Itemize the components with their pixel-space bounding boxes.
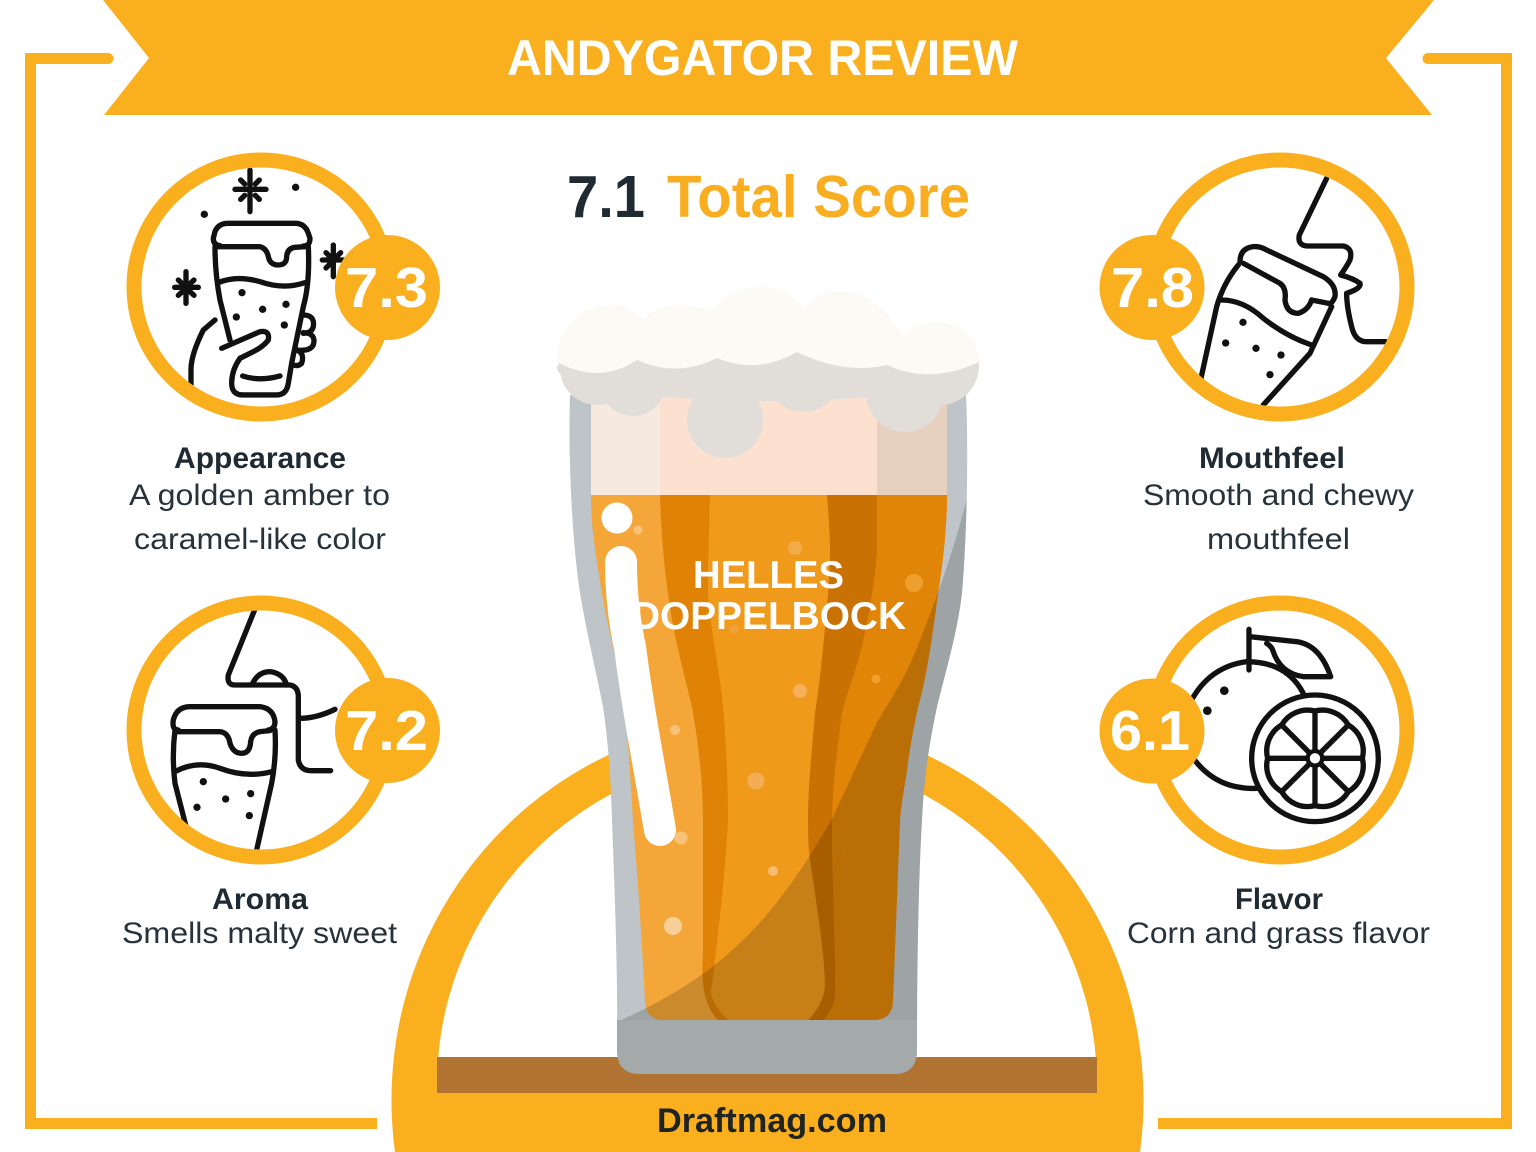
score badge: 7.2 — [345, 699, 428, 763]
aroma text: Smells malty sweet — [122, 917, 398, 950]
aroma text: Aroma — [212, 883, 308, 916]
icon: orange and slice — [1192, 629, 1378, 822]
glass shadow — [617, 499, 967, 1055]
score badge — [335, 678, 440, 783]
total score heading: Total Score — [667, 164, 970, 230]
flavor text: Corn and grass flavor — [1127, 917, 1430, 950]
source credit: Draftmag.com — [657, 1102, 887, 1140]
score badge: 6.1 — [1110, 699, 1190, 763]
score badge: 7.3 — [345, 256, 428, 320]
score badge — [1100, 678, 1204, 784]
appearance text: A golden amber to — [129, 479, 390, 512]
glass label: HELLES — [693, 554, 844, 597]
score badge — [335, 235, 440, 340]
title: ANDYGATOR REVIEW — [507, 30, 1019, 86]
beer — [580, 495, 960, 1025]
foam — [557, 287, 979, 458]
glass highlight — [602, 502, 660, 830]
score badge: 7.8 — [1111, 256, 1194, 320]
flavor text: Flavor — [1235, 883, 1323, 916]
aroma text — [122, 883, 398, 950]
glass base — [617, 1020, 917, 1074]
panel: appearance — [129, 160, 440, 556]
panel: flavor — [1100, 603, 1430, 950]
mouthfeel text: Mouthfeel — [1199, 442, 1345, 475]
panel: aroma — [122, 603, 440, 950]
mouthfeel text: Smooth and chewy — [1143, 479, 1414, 512]
beer glass — [557, 287, 979, 1080]
mouthfeel text: mouthfeel — [1207, 523, 1350, 556]
icon: sipping beer — [1201, 178, 1386, 405]
icon: smelling beer — [173, 611, 335, 850]
appearance text: caramel-like color — [134, 523, 386, 556]
flavor text — [1127, 883, 1430, 950]
appearance text: Appearance — [174, 442, 346, 475]
wooden shelf — [437, 1057, 1097, 1093]
glass label: DOPPELBOCK — [632, 595, 906, 638]
icon: hand holding beer — [175, 170, 344, 395]
mouthfeel text — [1143, 442, 1414, 556]
appearance text — [129, 442, 390, 556]
glass label — [632, 554, 906, 638]
total score heading: 7.1 — [567, 164, 645, 230]
panel: mouthfeel — [1100, 160, 1414, 556]
score badge — [1100, 235, 1204, 340]
title banner — [103, 0, 1434, 115]
arch behind glass — [391, 719, 1143, 1152]
